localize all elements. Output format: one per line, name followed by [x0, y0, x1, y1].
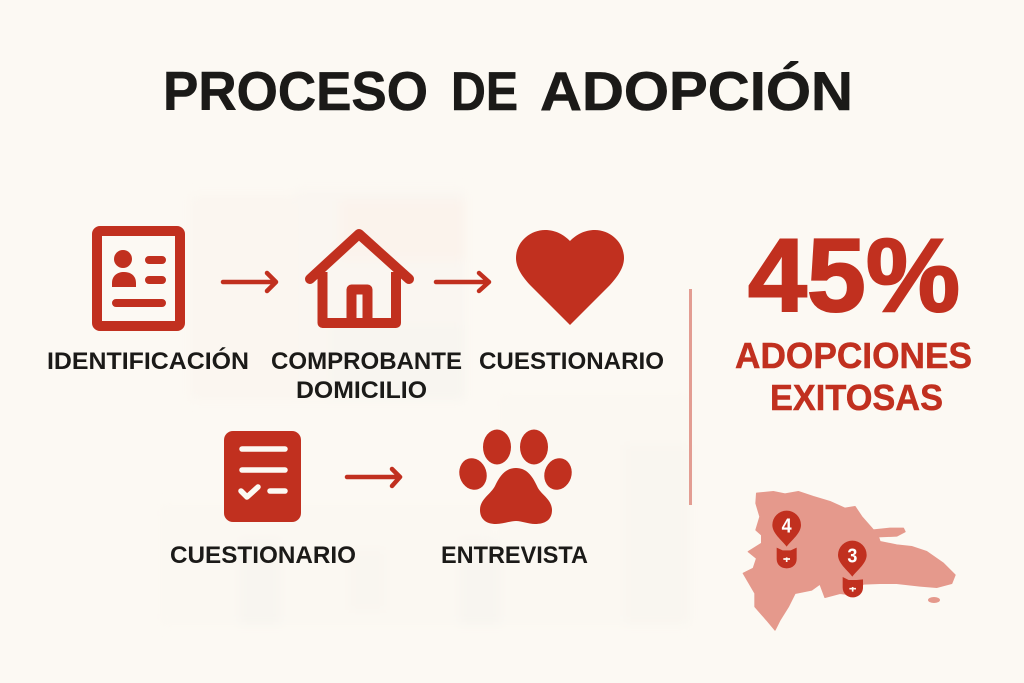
label: comprobante domicilio: COMPROBANTE	[271, 348, 462, 375]
step: identificación	[47, 231, 249, 375]
title: DE	[451, 60, 518, 122]
icon: paw	[455, 430, 576, 524]
statistic: 45% adopciones exitosas	[735, 218, 972, 418]
stat label	[735, 335, 972, 418]
stat label: EXITOSAS	[770, 377, 943, 418]
step: cuestionario	[479, 230, 664, 375]
title: PROCESO	[163, 60, 428, 122]
icon: ID card	[97, 231, 180, 326]
icon: house	[310, 234, 409, 323]
title: ADOPCIÓN	[540, 60, 853, 122]
title	[163, 60, 853, 122]
map pin: 3	[838, 541, 867, 597]
stat number: 45%	[748, 218, 960, 334]
step: entrevista	[441, 430, 588, 569]
step: comprobante domicilio	[271, 234, 462, 404]
arrow: comprobante to cuestionario	[436, 273, 489, 291]
label: cuestionario second row: CUESTIONARIO	[170, 542, 356, 569]
label: comprobante domicilio: DOMICILIO	[296, 377, 427, 404]
label: cuestionario: CUESTIONARIO	[479, 348, 664, 375]
label: identificación: IDENTIFICACIÓN	[47, 347, 249, 375]
arrow: identificación to comprobante	[223, 273, 276, 291]
icon: checklist document	[224, 431, 301, 522]
map: Dominican Republic	[743, 492, 955, 630]
map pin: 4	[772, 511, 801, 568]
stat label: ADOPCIONES	[735, 335, 972, 376]
label: entrevista: ENTREVISTA	[441, 542, 588, 569]
step: cuestionario second row	[170, 431, 356, 569]
divider	[689, 289, 692, 505]
icon: heart	[516, 230, 624, 325]
arrow: cuestionario to entrevista	[347, 469, 400, 486]
map pin: 3: 3	[847, 545, 857, 567]
label: comprobante domicilio	[271, 348, 462, 404]
map pin: 4: 4	[782, 515, 792, 537]
